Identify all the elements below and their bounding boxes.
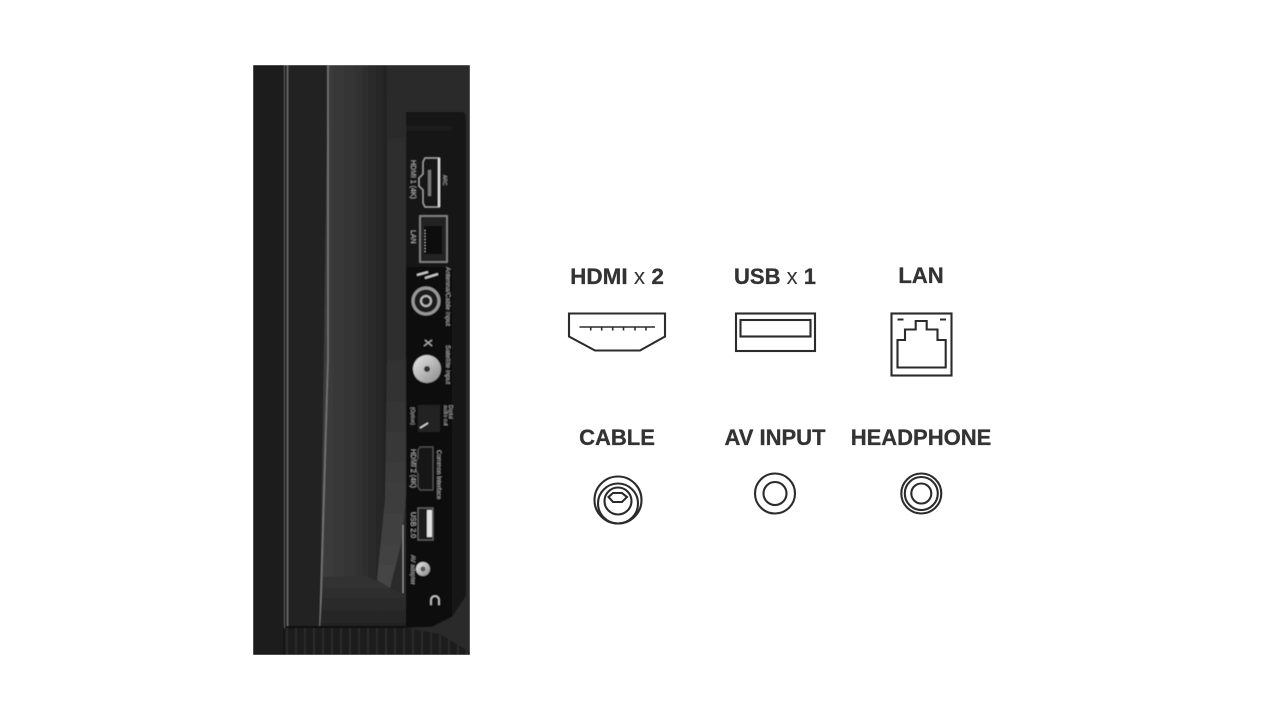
port: HDMI 1: ARC bbox=[441, 175, 447, 186]
port: AV adapter bbox=[409, 555, 430, 585]
curved strip bbox=[377, 65, 406, 588]
icon: cable bbox=[594, 476, 642, 524]
port: antenna bbox=[411, 267, 451, 326]
port: USB bbox=[409, 508, 433, 540]
stand column bbox=[320, 65, 388, 628]
port: HDMI 1: HDMI 1 (4K) bbox=[409, 160, 416, 199]
port: satellite bbox=[413, 340, 451, 384]
port panel black bbox=[406, 126, 452, 627]
port: headphone bbox=[431, 596, 439, 605]
heading: HDMI x 2: HDMI x 2 bbox=[570, 264, 664, 289]
port: LAN: LAN bbox=[409, 230, 416, 244]
port panel rim bbox=[406, 112, 466, 628]
port: HDMI 2 and common interface: HDMI 2 (4K) bbox=[409, 449, 416, 488]
icon: USB bbox=[736, 314, 815, 351]
port: optical: (Option) bbox=[409, 407, 415, 425]
port: optical: Digital bbox=[447, 405, 453, 419]
port: optical: audio out bbox=[442, 405, 448, 426]
port: antenna: Antenna/Cable input bbox=[444, 267, 451, 326]
port: HDMI 2 and common interface bbox=[409, 447, 441, 500]
rear panel bbox=[289, 65, 327, 628]
photo: TV side panel with ports bbox=[253, 65, 470, 655]
port: LAN bbox=[409, 216, 447, 262]
icon: AV input bbox=[755, 474, 795, 514]
heading: CABLE: CABLE bbox=[579, 425, 655, 450]
port: optical bbox=[409, 405, 453, 432]
ribbed base bbox=[285, 628, 470, 655]
icon: LAN bbox=[892, 314, 952, 376]
heading: LAN: LAN bbox=[898, 263, 944, 288]
icon: HDMI bbox=[569, 314, 665, 350]
heading: HEADPHONE: HEADPHONE bbox=[851, 425, 991, 450]
stand foot bbox=[320, 575, 407, 628]
port: HDMI 1 bbox=[409, 158, 447, 207]
port: HDMI 2 and common interface: Common Interface bbox=[435, 450, 441, 500]
heading: AV INPUT: AV INPUT bbox=[724, 425, 826, 450]
port: AV adapter: AV adapter bbox=[409, 555, 415, 585]
icon: headphone bbox=[901, 474, 941, 514]
heading: USB x 1: USB x 1 bbox=[734, 264, 816, 289]
port: satellite: Satellite input bbox=[444, 345, 451, 384]
left bezel strip bbox=[253, 65, 283, 655]
port: USB: USB 2.0 bbox=[409, 512, 416, 538]
